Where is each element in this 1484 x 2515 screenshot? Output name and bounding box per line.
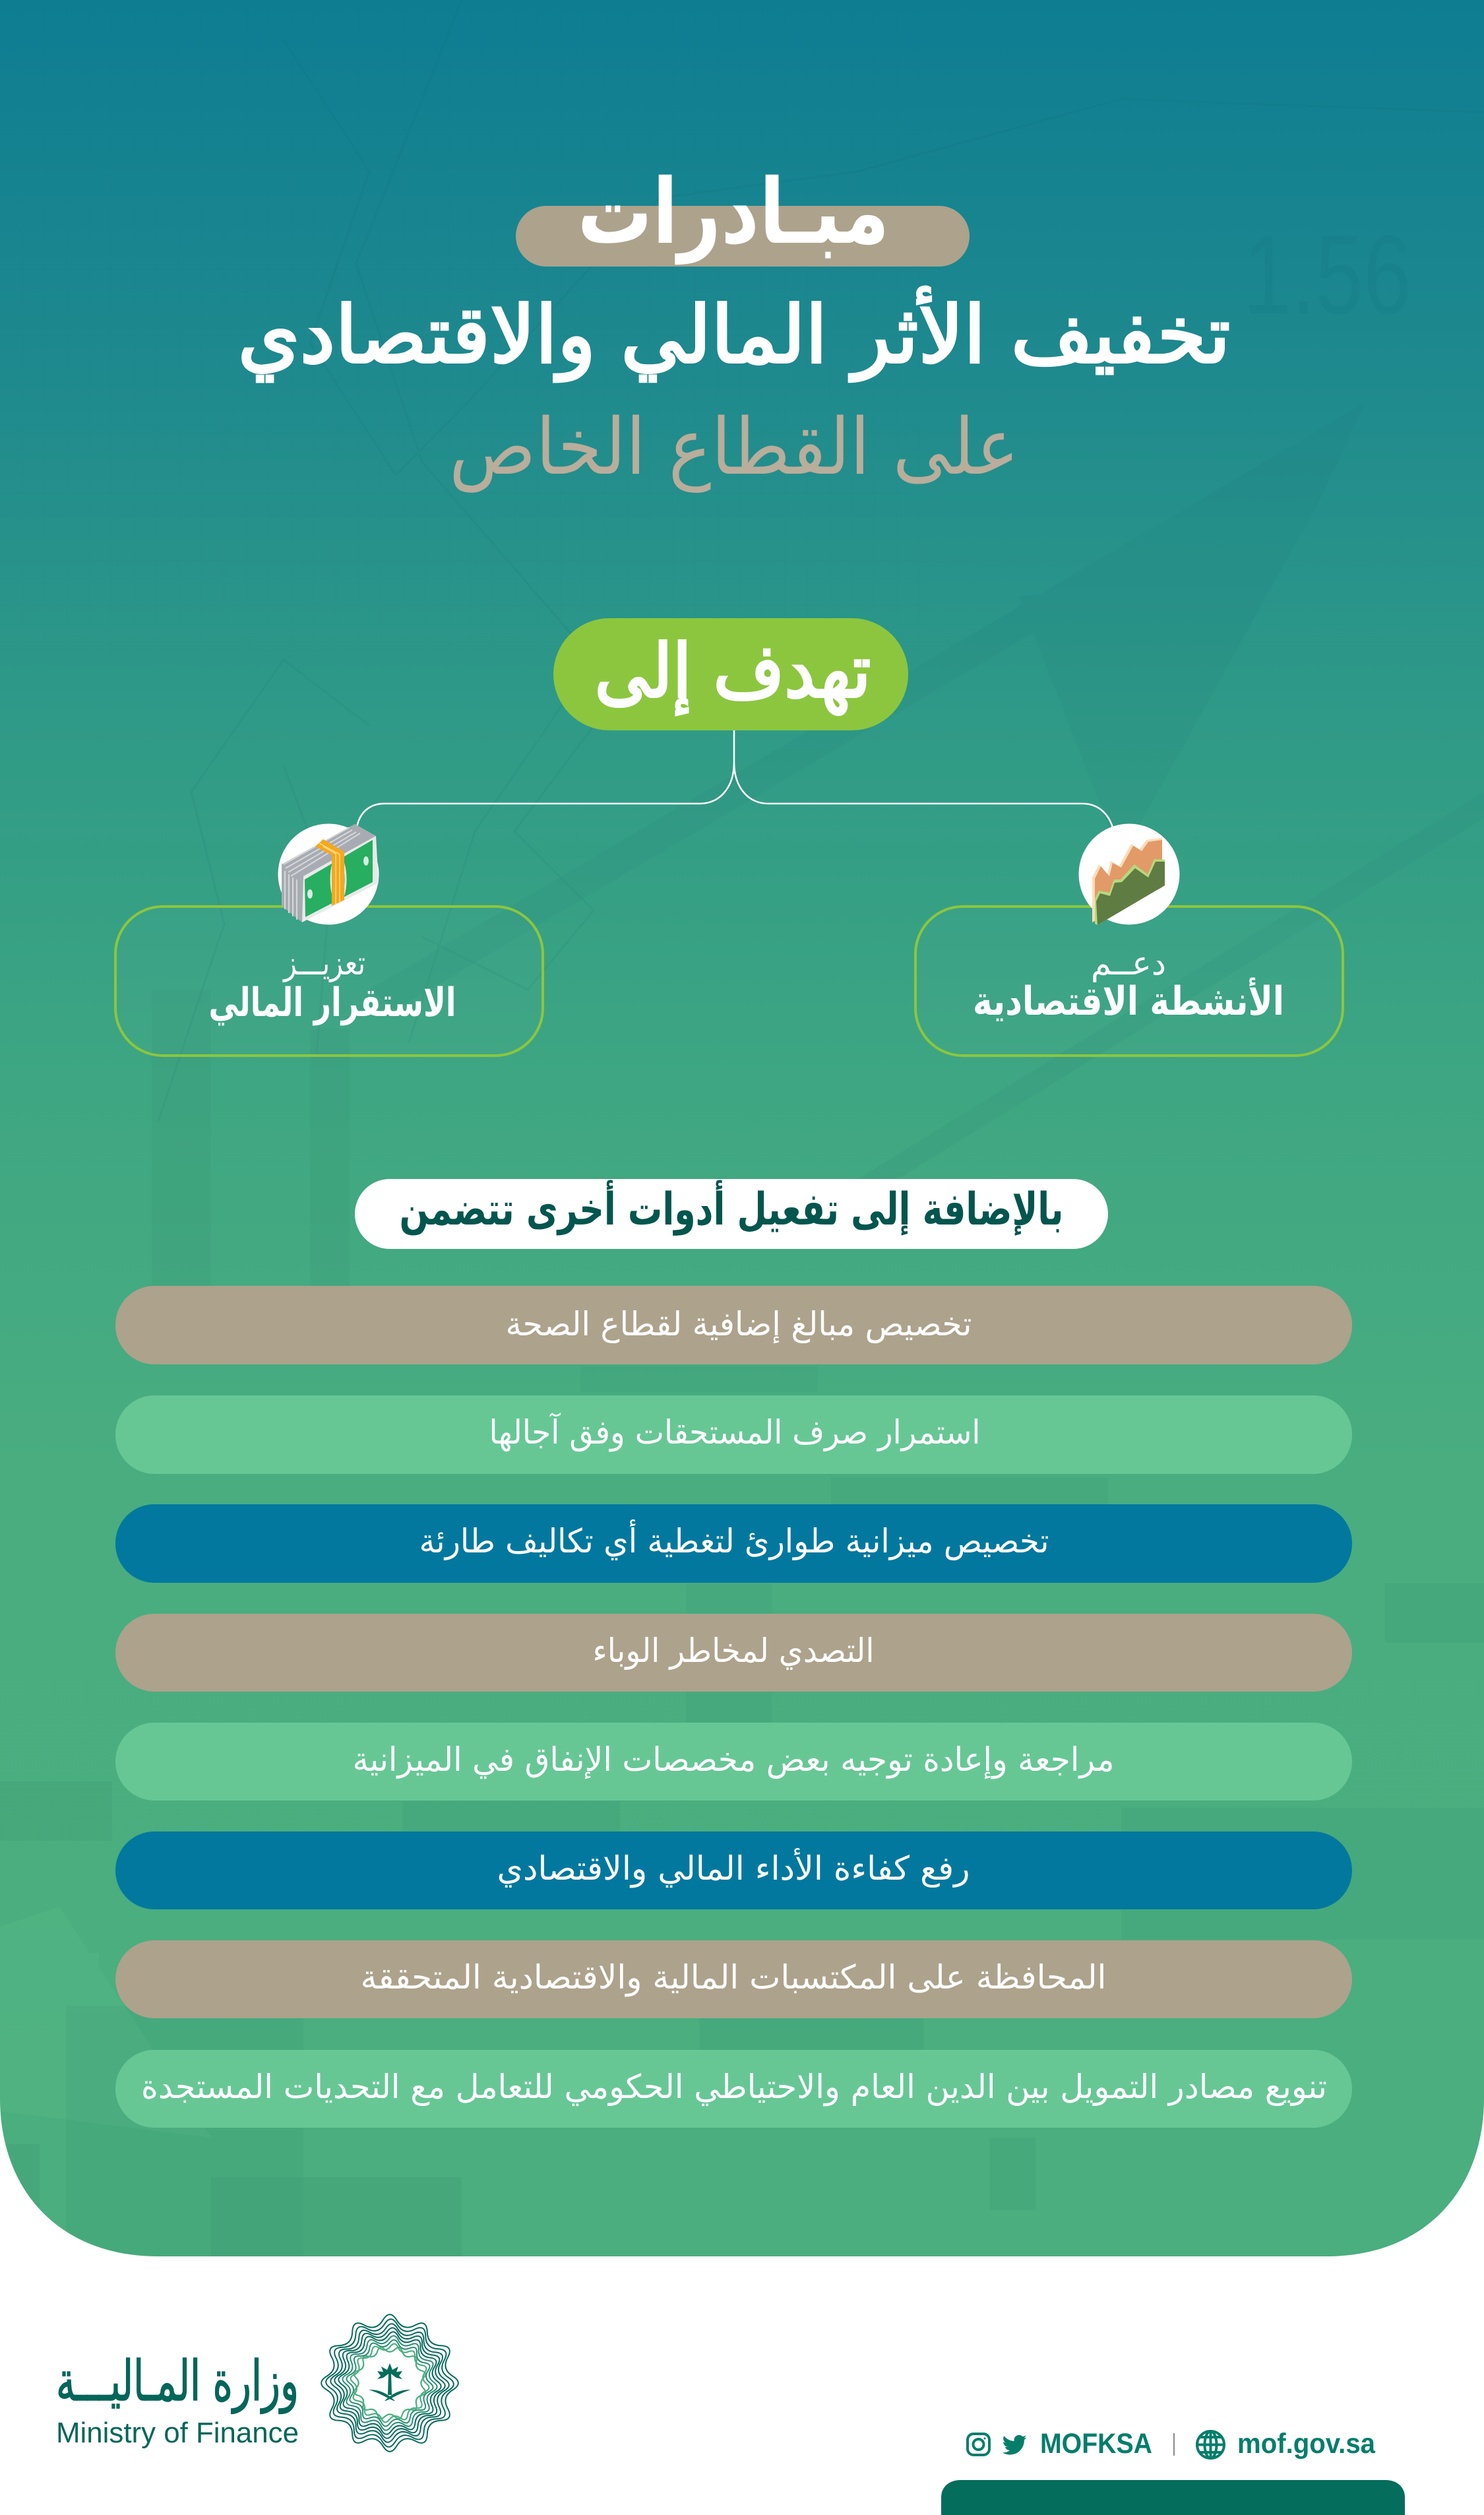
panel: right goal box xyxy=(915,907,1343,1056)
list item 8: تنويع مصادر التمويل بين الدين العام والاحتياطي الحكومي للتعامل مع التحديات المستجدة xyxy=(141,2068,1327,2107)
list item 7 xyxy=(115,1940,1352,2018)
list item 7: المحافظة على المكتسبات المالية والاقتصادية المتحققة xyxy=(360,1958,1107,1997)
background: financial chart overlay xyxy=(369,402,1484,1188)
subheading text: بالإضافة إلى تفعيل أدوات أخرى تتضمن xyxy=(400,1180,1063,1236)
list item 2 xyxy=(115,1395,1352,1474)
list item 1 xyxy=(115,1286,1352,1364)
icon: growth chart xyxy=(1079,823,1179,925)
list item 1: تخصيص مبالغ إضافية لقطاع الصحة xyxy=(505,1305,972,1344)
icon: money stack xyxy=(278,823,379,925)
right goal light word: دعــم xyxy=(1091,944,1166,982)
list item 6: رفع كفاءة الأداء المالي والاقتصادي xyxy=(497,1848,970,1888)
website text: mof.gov.sa xyxy=(1237,2428,1376,2460)
footer tab xyxy=(941,2480,1405,2515)
icon: twitter bird xyxy=(1003,2435,1026,2455)
title line 3: على القطاع الخاص xyxy=(449,401,1019,493)
list item 4 xyxy=(115,1614,1352,1692)
background: world map outline xyxy=(158,0,1484,1122)
footer social row xyxy=(968,2428,1376,2460)
title line 2: تخفيف الأثر المالي والاقتصادي xyxy=(237,287,1231,382)
left goal light word: تعزيـــز xyxy=(282,944,365,982)
icon: instagram xyxy=(968,2434,989,2455)
icon: palm and swords xyxy=(369,2363,411,2401)
title line 1: مبـادرات xyxy=(578,160,889,265)
background: trees and city collage xyxy=(0,990,1484,2256)
list item 2: استمرار صرف المستحقات وفق آجالها xyxy=(489,1413,980,1452)
aim pill xyxy=(553,618,908,730)
aim pill text: تهدف إلى xyxy=(595,629,871,715)
logo: arabic name: وزارة المـاليـــة xyxy=(56,2349,299,2414)
logo: ministry emblem xyxy=(321,2314,458,2452)
logo: english name: Ministry of Finance xyxy=(56,2417,299,2449)
title pill xyxy=(516,206,970,267)
list item 5 xyxy=(115,1723,1352,1800)
subheading pill xyxy=(355,1179,1108,1249)
connector tree xyxy=(357,730,1113,827)
panel: left goal box xyxy=(115,907,543,1056)
handle text: MOFKSA xyxy=(1040,2428,1152,2460)
right goal bold words: الأنشطة الاقتصادية xyxy=(973,977,1284,1025)
list item 6 xyxy=(115,1831,1352,1909)
list item 3: تخصيص ميزانية طوارئ لتغطية أي تكاليف طارئة xyxy=(419,1519,1049,1560)
icon: globe xyxy=(1197,2431,1224,2458)
list item 5: مراجعة وإعادة توجيه بعض مخصصات الإنفاق في الميزانية xyxy=(352,1740,1115,1779)
list item 3 xyxy=(115,1504,1352,1583)
left goal bold words: الاستقرار المالي xyxy=(208,980,456,1026)
list item 8 xyxy=(115,2050,1352,2128)
background: faint ticker number: 1.56 xyxy=(1243,212,1411,338)
list item 4: التصدي لمخاطر الوباء xyxy=(592,1632,875,1670)
